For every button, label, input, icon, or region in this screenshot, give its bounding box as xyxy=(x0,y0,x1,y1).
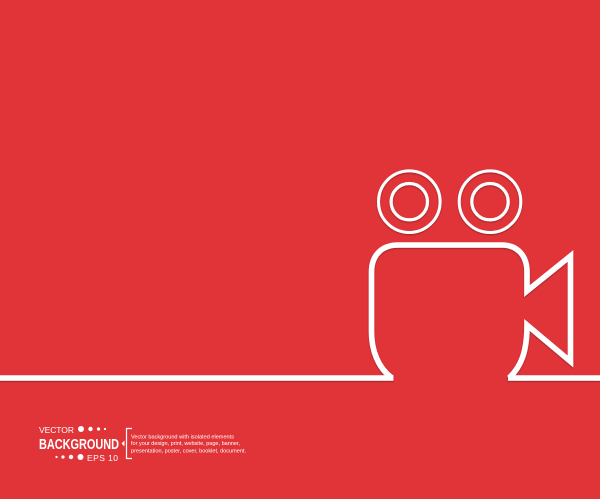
label: vector: VECTOR xyxy=(39,425,74,435)
left baseline xyxy=(0,375,394,381)
dots: bottom row xyxy=(55,454,84,460)
description text: Vector background with isolated elements xyxy=(131,434,234,440)
left film reel inner xyxy=(391,184,427,220)
description text: presentation, poster, cover, booklet, document. xyxy=(131,448,246,454)
right film reel inner xyxy=(472,184,508,220)
right baseline xyxy=(508,375,600,381)
label: background: BACKGROUND xyxy=(39,437,119,453)
label: eps 10: EPS 10 xyxy=(87,453,118,463)
description text: for your design, print, website, page, banner, xyxy=(131,441,240,447)
caption block xyxy=(39,425,246,463)
left film reel outer xyxy=(378,171,440,232)
description text xyxy=(131,434,246,454)
bracket xyxy=(126,428,132,458)
camera body with lens xyxy=(372,245,570,378)
icon: video camera line art xyxy=(0,171,600,378)
dots: top row xyxy=(78,426,106,432)
pointer xyxy=(122,440,124,446)
right film reel outer xyxy=(459,171,521,232)
